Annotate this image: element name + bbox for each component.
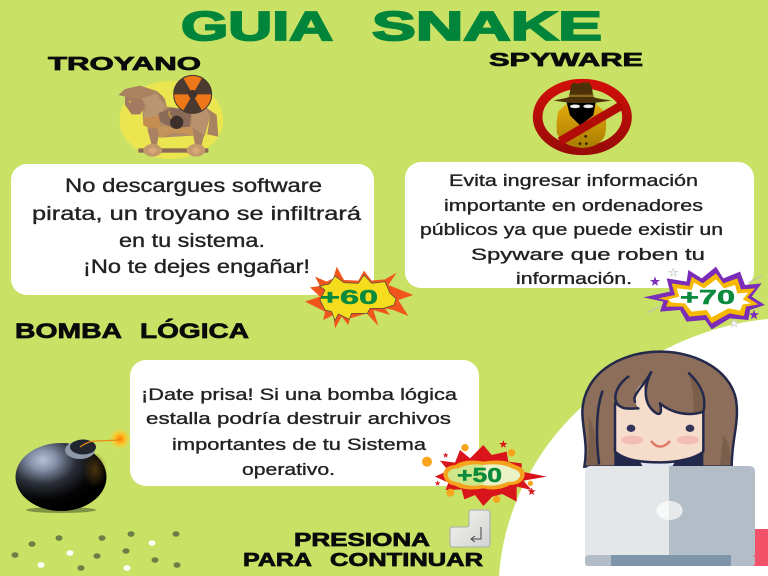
badge: +50 burst: +50 [457,465,502,487]
text: bomba lógica advice [141,385,458,479]
text: spyware advice: Spyware que roben tu [471,245,705,264]
badge: +60 burst [305,267,413,328]
text: troyano advice: ¡No te dejes engañar! [83,257,310,278]
heading: bomba lógica: BOMBA [15,320,122,343]
title: SNAKE [372,3,602,49]
text: para continuar: CONTINUAR [330,550,483,570]
text: troyano advice: pirata, un troyano se infiltrará [32,204,362,225]
text: spyware advice: información. [516,269,632,288]
title: GUIA [181,3,333,49]
icon: bomb [16,428,131,513]
text: spyware advice: Evita ingresar información [449,171,698,190]
panel: bomba lógica [130,360,479,486]
text: bomba lógica advice: operativo. [242,460,335,479]
icon: burning fuse [80,428,131,450]
text: para continuar: PARA [243,550,312,570]
panel: troyano [11,164,374,295]
badge: +50 burst [422,440,547,506]
laptop [585,466,755,566]
title [181,3,602,49]
decorative dot cluster [12,531,180,571]
badge: +70 burst [643,267,765,329]
text: bomba lógica advice: ¡Date prisa! Si una bomba lógica [141,385,458,404]
icon: enter key [450,510,490,547]
heading: troyano: TROYANO [48,54,201,74]
heading: bomba lógica: LÓGICA [140,319,249,343]
badge: +60 burst: +60 [320,287,378,309]
text: bomba lógica advice: estalla podría destruir archivos [146,409,451,428]
panel: spyware [405,162,754,288]
illustration: girl with laptop [582,352,755,566]
pink accent block [748,529,768,566]
text: para continuar [243,550,483,570]
text: troyano advice: No descargues software [65,176,322,197]
text: presiona: PRESIONA [294,530,430,550]
badge: +70 burst: +70 [680,287,735,309]
icon: trojan horse [118,75,223,159]
text: spyware advice: públicos ya que puede existir un [420,220,723,239]
heading: spyware: SPYWARE [489,50,643,70]
heading: bomba lógica [15,319,249,343]
white corner curve [499,319,768,576]
text: troyano advice [32,176,362,278]
text: spyware advice [420,171,723,288]
text: spyware advice: importante en ordenadores [444,196,703,215]
text: troyano advice: en tu sistema. [119,231,265,252]
text: bomba lógica advice: importantes de tu Sistema [172,435,427,454]
icon: radiation disc [174,75,212,113]
icon: spy in prohibition sign [538,82,627,150]
